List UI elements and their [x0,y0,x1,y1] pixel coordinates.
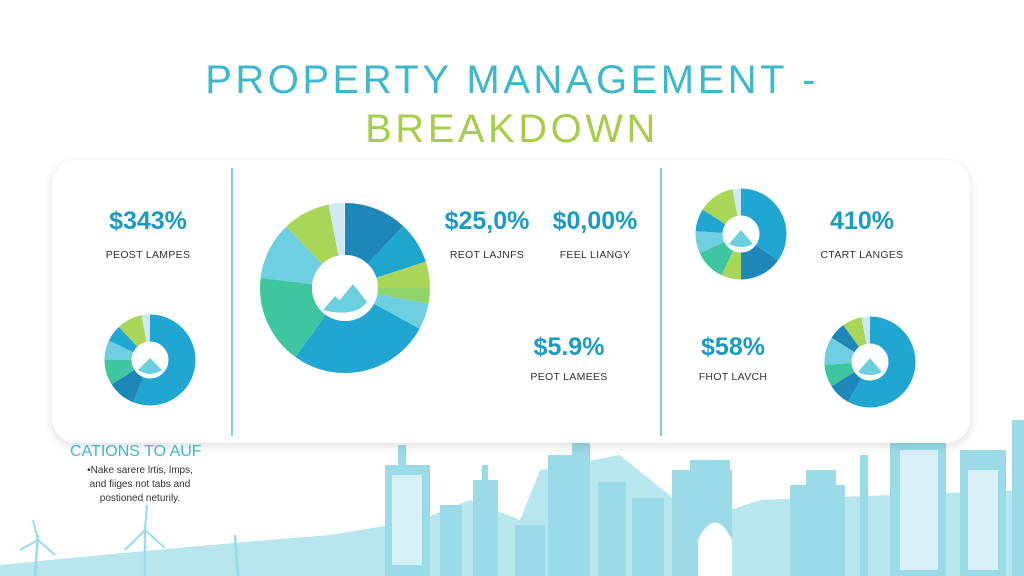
stat: $25,0% [445,207,529,261]
stat: $58%: FHOT LAVCH [699,371,767,383]
text block: cations note: •Nake sarere lrtis, lmps, [87,465,193,476]
stat: $5.9%: PEOT LAMEES [530,371,608,383]
text block: cations note [70,443,202,504]
stat: $5.9% [530,333,608,383]
stat: 410% [821,207,903,261]
text block: cations note: CATIONS TO AUF [70,443,202,460]
title: BREAKDOWN [365,107,659,151]
stat: $25,0%: REOT LAJNFS [450,249,524,261]
stat: $58%: $58% [701,333,765,361]
title [205,58,819,151]
stat: $343%: PEOST LAMPES [106,249,190,261]
stat: $343% [106,207,190,261]
text block: cations note: and fiiges not tabs and [90,479,190,490]
stat: $0,00%: FEEL LIANGY [560,249,630,261]
text block: cations note: postioned neturily. [100,493,180,504]
title: PROPERTY MANAGEMENT - [205,58,819,102]
stat: 410%: 410% [830,207,894,235]
stat: $0,00%: $0,00% [553,207,637,235]
chart: small donut left [104,314,196,406]
stat: $25,0%: $25,0% [445,207,529,235]
stat: $5.9%: $5.9% [534,333,604,361]
stat: 410%: CTART LANGES [821,249,903,261]
panel: main card [52,160,970,443]
chart: donut right bottom [824,316,916,408]
stat: $58% [699,333,767,383]
stat: $0,00% [553,207,637,261]
chart: big donut [260,203,430,373]
stat: $343%: $343% [109,207,187,235]
chart: donut right top [696,188,786,280]
